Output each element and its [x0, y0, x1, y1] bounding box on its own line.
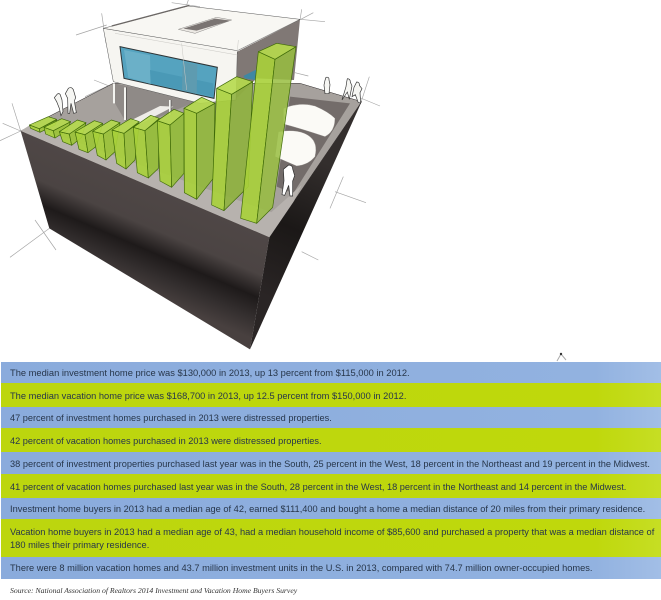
- band: housing totals: [1, 557, 661, 579]
- house roof: [103, 6, 300, 51]
- band: distressed investment: 47 percent of investment homes purchased in 2013 were distressed properties.: [10, 413, 332, 423]
- bar 6: [112, 119, 139, 169]
- small survey mark: [556, 352, 566, 362]
- bar 3: [59, 120, 86, 145]
- person beside the tallest bar: [282, 165, 295, 196]
- band: investment buyers: [1, 498, 661, 519]
- soil left face: [21, 131, 269, 349]
- house pillars: [114, 83, 170, 120]
- band: investment regions: [1, 452, 661, 474]
- source note: Source: National Association of Realtors 2014 Investment and Vacation Home Buyers Survey: [10, 586, 297, 595]
- plot: ground block: [21, 83, 362, 349]
- bar 11: [241, 43, 296, 223]
- band: vacation home price: [1, 383, 661, 407]
- band: vacation regions: 41 percent of vacation homes purchased last year was in the South, 28 percent in the West, 18 percent in the Northeast and 14 percent in the Midwest.: [10, 482, 626, 492]
- illustration: house on a plot with rising green bar chart: [0, 0, 380, 350]
- bar 7: [133, 115, 159, 178]
- band: distressed vacation: 42 percent of vacation homes purchased in 2013 were distressed properties.: [10, 436, 322, 446]
- band: vacation buyers: [1, 519, 661, 557]
- people: background group right: [324, 77, 362, 103]
- bar 1: [29, 117, 57, 132]
- band: vacation buyers: 180 miles their primary residence.: [10, 540, 149, 550]
- band: investment buyers: Investment home buyers in 2013 had a median age of 42, earned $111,400 and bought a home a median distance of 20 miles from their primary residence.: [10, 504, 645, 514]
- band: distressed vacation: [1, 428, 661, 452]
- house window: [120, 47, 217, 98]
- ground top surface: [21, 83, 362, 237]
- house shadow on ground: [113, 83, 200, 123]
- band: vacation regions: [1, 474, 661, 498]
- roof skylight: [178, 17, 232, 33]
- band: vacation buyers: Vacation home buyers in 2013 had a median age of 43, had a median household income of $85,600 and purchased a property that was a median distance of: [10, 527, 654, 537]
- house right wall: [235, 19, 300, 100]
- band: investment regions: 38 percent of investment properties purchased last year was in the South, 25 percent in the West, 18 percent in the Northeast and 19 percent in the Midwest.: [10, 459, 650, 469]
- fact bands: [1, 362, 661, 579]
- ground right shadow strip: [277, 97, 350, 193]
- band: investment home price: [1, 362, 661, 383]
- band: housing totals: There were 8 million vacation homes and 43.7 million investment units in the U.S. in 2013, compared with 74.7 million owner-occupied homes.: [10, 563, 592, 573]
- house: [103, 5, 300, 124]
- bar 2: [44, 119, 71, 138]
- bar 8: [157, 109, 184, 187]
- green bar chart: [29, 43, 296, 223]
- band: vacation home price: The median vacation home price was $168,700 in 2013, up 12.5 percent from $150,000 in 2012.: [10, 391, 406, 401]
- cars: [275, 104, 335, 166]
- car far: [283, 104, 335, 137]
- soil right face: [250, 102, 362, 349]
- construction lines: [0, 0, 380, 270]
- bar 5: [93, 120, 120, 160]
- bar 10: [212, 77, 253, 211]
- band: distressed investment: [1, 407, 661, 428]
- people: background pair left: [54, 88, 76, 116]
- house front wall: [103, 28, 237, 103]
- ground front strip: [21, 125, 283, 237]
- band: investment home price: The median investment home price was $130,000 in 2013, up 13 percent from $115,000 in 2012.: [10, 368, 410, 378]
- car near: [275, 131, 316, 166]
- wall glass: [243, 69, 257, 80]
- bar 9: [184, 97, 215, 199]
- bar 4: [75, 121, 103, 153]
